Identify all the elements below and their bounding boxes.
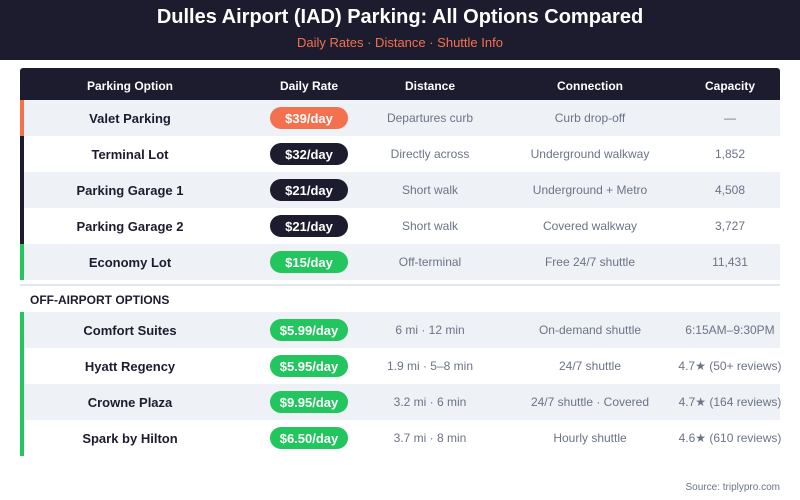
row: economy: Free 24/7 shuttle xyxy=(545,255,635,269)
row: garage 2: Parking Garage 2 xyxy=(77,218,183,234)
row: garage 2 xyxy=(20,208,745,244)
row: terminal lot: Directly across xyxy=(391,147,469,161)
row: comfort suites: 6:15AM–9:30PM xyxy=(685,323,775,337)
row: valet: Valet Parking xyxy=(89,110,171,126)
source: Source: triplypro.com xyxy=(686,482,780,493)
divider xyxy=(20,284,780,286)
row: comfort suites: $5.99/day xyxy=(280,322,338,338)
row: crowne plaza: Crowne Plaza xyxy=(88,394,172,410)
row: garage 1: Parking Garage 1 xyxy=(77,182,183,198)
row: hyatt: 24/7 shuttle xyxy=(559,359,621,373)
row: garage 2: Covered walkway xyxy=(543,219,637,233)
table header: Distance xyxy=(405,78,455,92)
row: crowne plaza: 24/7 shuttle · Covered xyxy=(531,395,649,409)
table header: Daily Rate xyxy=(280,78,338,92)
row: terminal lot: $32/day xyxy=(285,146,333,162)
row: garage 1 xyxy=(20,172,780,208)
row: garage 2: $21/day xyxy=(285,218,333,234)
row: economy: 11,431 xyxy=(712,255,748,269)
table header: Capacity xyxy=(705,78,755,92)
table header: Connection xyxy=(557,78,623,92)
row: valet: — xyxy=(724,111,736,125)
row: hyatt: $5.95/day xyxy=(280,358,338,374)
row: economy: $15/day xyxy=(285,254,333,270)
row: hyatt xyxy=(20,348,782,384)
row: spark xyxy=(20,420,781,456)
row: comfort suites: On-demand shuttle xyxy=(539,323,641,337)
row: economy: Off-terminal xyxy=(399,255,461,269)
row: garage 2: Short walk xyxy=(402,219,458,233)
row: terminal lot: 1,852 xyxy=(715,147,745,161)
row: garage 2: 3,727 xyxy=(715,219,745,233)
row: spark: Spark by Hilton xyxy=(82,430,178,446)
row: hyatt: 4.7★ (50+ reviews) xyxy=(678,359,782,373)
section heading: off-airport: OFF-AIRPORT OPTIONS xyxy=(30,293,169,307)
row: comfort suites: 6 mi · 12 min xyxy=(395,323,465,337)
row: terminal lot xyxy=(20,136,745,172)
subtitle: Daily Rates · Distance · Shuttle Info xyxy=(297,35,503,50)
title: Dulles Airport (IAD) Parking: All Options Compared xyxy=(157,6,643,28)
table header xyxy=(20,68,780,101)
row: economy xyxy=(20,244,780,280)
row: crowne plaza: 4.7★ (164 reviews) xyxy=(679,395,781,409)
row: terminal lot: Terminal Lot xyxy=(91,146,169,162)
header banner xyxy=(0,0,800,60)
row: garage 1: 4,508 xyxy=(715,183,745,197)
row: spark: 4.6★ (610 reviews) xyxy=(679,431,781,445)
row: crowne plaza: 3.2 mi · 6 min xyxy=(394,395,466,409)
row: hyatt: Hyatt Regency xyxy=(85,358,175,374)
table header: Parking Option xyxy=(87,78,173,92)
row: valet xyxy=(20,100,780,136)
row: crowne plaza xyxy=(20,384,780,420)
row: valet: Departures curb xyxy=(387,111,473,125)
row: spark: 3.7 mi · 8 min xyxy=(394,431,466,445)
row: garage 1: Short walk xyxy=(402,183,458,197)
row: valet: Curb drop-off xyxy=(555,111,625,125)
row: valet: $39/day xyxy=(285,110,333,126)
row: comfort suites xyxy=(20,312,780,348)
row: crowne plaza: $9.95/day xyxy=(280,394,338,410)
row: terminal lot: Underground walkway xyxy=(531,147,649,161)
row: economy: Economy Lot xyxy=(89,254,171,270)
row: garage 1: Underground + Metro xyxy=(533,183,647,197)
row: garage 1: $21/day xyxy=(285,182,333,198)
row: comfort suites: Comfort Suites xyxy=(83,322,177,338)
row: spark: Hourly shuttle xyxy=(553,431,627,445)
row: spark: $6.50/day xyxy=(280,430,338,446)
row: hyatt: 1.9 mi · 5–8 min xyxy=(387,359,473,373)
